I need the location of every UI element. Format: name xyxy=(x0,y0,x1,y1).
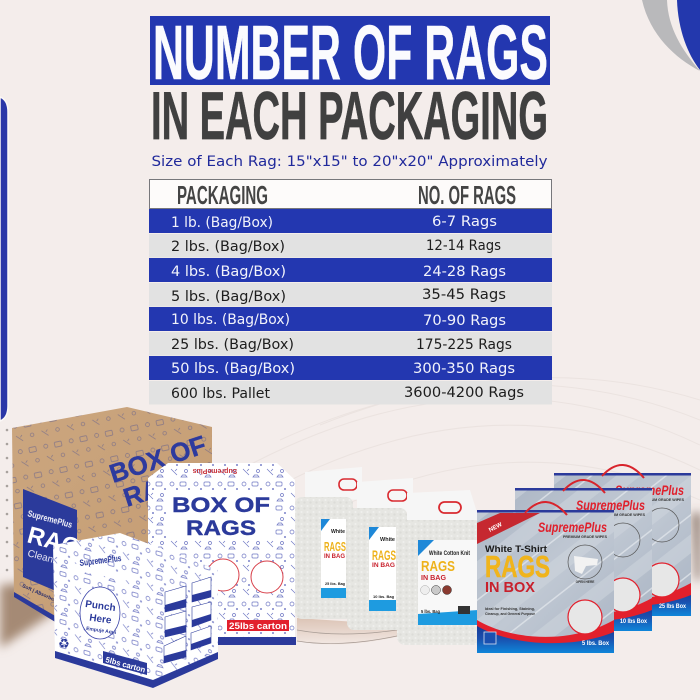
new ribbon: NEW xyxy=(488,522,504,534)
decoration: top right swooshes xyxy=(642,0,700,71)
row: 2 lbs: 2 lbs. (Bag/Box) xyxy=(171,239,285,255)
round platform under bags xyxy=(297,618,400,645)
bag label: RAGS xyxy=(421,558,455,575)
row: 50 lbs: 50 lbs. (Bag/Box) xyxy=(171,361,295,377)
packaging table xyxy=(149,180,552,404)
box: 25 lbs: 25 lbs Box xyxy=(659,604,687,610)
5 lb white carton xyxy=(53,533,218,688)
bag label xyxy=(321,519,346,598)
bag label: IN BAG xyxy=(324,553,345,560)
row: 50 lbs: 300-350 Rags xyxy=(413,361,515,377)
box: 10 lbs: PREMIUM GRADE WIPES xyxy=(601,512,645,517)
bag handle xyxy=(439,502,461,513)
kraft box label: RAGS xyxy=(24,522,98,566)
punch here circle: Punch xyxy=(84,599,116,614)
bag label: RAGS xyxy=(372,547,396,563)
box: 25 lbs xyxy=(554,465,691,616)
row: 4 lbs xyxy=(149,258,552,282)
box handle xyxy=(525,502,567,515)
row: 10 lbs xyxy=(149,307,552,331)
table header: NO. OF RAGS xyxy=(418,180,516,210)
carton brand: SupremePlus xyxy=(79,553,122,568)
row: 1 lb: 6-7 Rags xyxy=(432,214,497,230)
background arcs xyxy=(200,378,700,600)
bag handle xyxy=(388,490,407,501)
open here circle: OPEN HERE xyxy=(576,580,594,584)
punch here circle xyxy=(80,587,120,639)
25 lbs carton label: 25lbs carton xyxy=(229,621,287,631)
bag body xyxy=(397,520,483,645)
box: 25 lbs: PREMIUM GRADE WIPES xyxy=(640,497,684,502)
row: 25 lbs xyxy=(149,332,552,356)
bag body xyxy=(347,508,407,630)
subtitle: Size of Each Rag: 15"x15" to 20"x20" Approximately xyxy=(152,154,548,170)
row: 50 lbs xyxy=(149,356,552,380)
table header: PACKAGING xyxy=(177,180,268,210)
box heading: IN BOX xyxy=(485,579,535,596)
bag top flap xyxy=(407,490,480,522)
blue swoosh xyxy=(677,0,700,70)
row: 5 lbs: 5 lbs. (Bag/Box) xyxy=(171,289,286,305)
bag label: 25 lbs. Bag xyxy=(325,581,346,586)
bag label: White Cotton Knit xyxy=(429,551,470,557)
25 lb white carton xyxy=(148,463,296,645)
decoration: dot column xyxy=(6,429,8,571)
carton top brand: SupremePlus xyxy=(193,467,237,474)
usage pictograms xyxy=(164,577,211,663)
box: 10 lbs: SupremePlus xyxy=(576,497,645,513)
row: 25 lbs: 175-225 Rags xyxy=(416,337,512,353)
bag label: White xyxy=(331,529,345,535)
wooden floor patches xyxy=(0,513,700,648)
row: 10 lbs: 70-90 Rags xyxy=(423,313,506,329)
row: 600 lbs: 600 lbs. Pallet xyxy=(171,386,270,402)
bag label: 10 lbs. Bag xyxy=(373,594,395,599)
decoration: left blue tab xyxy=(0,97,8,421)
row: 2 lbs: 12-14 Rags xyxy=(426,238,501,254)
bag top flap xyxy=(305,467,362,500)
kraft box label: SupremePlus xyxy=(26,508,74,530)
kraft box label xyxy=(23,489,98,600)
box wave xyxy=(477,620,614,653)
row: 600 lbs: 3600-4200 Rags xyxy=(404,385,524,401)
kraft box heading: RAGS xyxy=(120,461,200,513)
punch here circle: Empuje Aqui xyxy=(86,626,117,636)
rag window xyxy=(568,600,602,634)
box: 10 lbs xyxy=(515,480,652,631)
row: 600 lbs xyxy=(149,381,552,404)
bag handle xyxy=(339,479,357,490)
carton heading: BOX OF xyxy=(172,494,270,517)
bag top flap xyxy=(357,478,413,512)
kraft box heading xyxy=(108,435,205,507)
kraft box xyxy=(12,407,212,623)
row: 4 lbs: 4 lbs. (Bag/Box) xyxy=(171,264,286,280)
bag label: White xyxy=(380,537,395,543)
box description: Cleanup, and General Purpose xyxy=(485,612,535,616)
carton brand xyxy=(72,553,130,581)
box brand: PREMIUM GRADE WIPES xyxy=(563,534,607,539)
bag label xyxy=(369,527,396,611)
bag label xyxy=(418,540,478,625)
box heading: White T-Shirt xyxy=(485,544,547,554)
open here circle xyxy=(568,545,602,584)
carton heading: RAGS xyxy=(186,517,256,540)
row: 1 lb: 1 lb. (Bag/Box) xyxy=(171,215,273,231)
kraft box label: Cleaning xyxy=(26,548,67,569)
table header xyxy=(150,180,552,210)
row: 5 lbs xyxy=(149,283,552,306)
bag label: IN BAG xyxy=(421,573,446,582)
5 lbs carton label: 5lbs carton xyxy=(104,655,147,675)
row: 5 lbs: 35-45 Rags xyxy=(422,287,506,303)
box heading: RAGS xyxy=(485,549,550,584)
carton red circles xyxy=(207,559,283,593)
box description: Ideal for Finishing, Staining, xyxy=(485,607,535,611)
box brand: SupremePlus xyxy=(538,519,607,535)
icon: recycle: ♻ xyxy=(58,637,70,652)
bag body xyxy=(295,497,353,619)
row: 1 lb xyxy=(149,209,552,233)
bag label: RAGS xyxy=(324,539,346,554)
bag label: IN BAG xyxy=(372,562,395,569)
grey swoosh xyxy=(642,0,700,71)
row: 2 lbs xyxy=(149,234,552,258)
box description xyxy=(485,607,535,616)
box: 5 lbs xyxy=(477,502,614,653)
kraft box heading: BOX OF xyxy=(106,429,210,489)
row: 25 lbs: 25 lbs. (Bag/Box) xyxy=(171,337,294,353)
bag: 5 lbs xyxy=(397,490,483,645)
bag: 10 lbs xyxy=(347,478,413,630)
title xyxy=(150,10,550,154)
row: 10 lbs: 10 lbs. (Bag/Box) xyxy=(171,312,290,328)
box brand xyxy=(538,519,607,539)
box heading xyxy=(485,544,550,596)
punch here circle: Here xyxy=(89,613,113,627)
bag label: 5 lbs. Bag xyxy=(421,609,440,614)
box weight: 5 lbs. Box xyxy=(582,641,610,647)
box logo xyxy=(484,632,496,644)
title bar: number of rags xyxy=(150,16,550,85)
kraft box small print: Soft | Absorbent xyxy=(21,583,59,605)
new ribbon xyxy=(477,513,540,544)
row: 4 lbs: 24-28 Rags xyxy=(423,264,506,280)
carton heading xyxy=(168,492,274,540)
bag: 25 lbs xyxy=(295,467,362,619)
box: 10 lbs: 10 lbs Box xyxy=(620,619,648,625)
